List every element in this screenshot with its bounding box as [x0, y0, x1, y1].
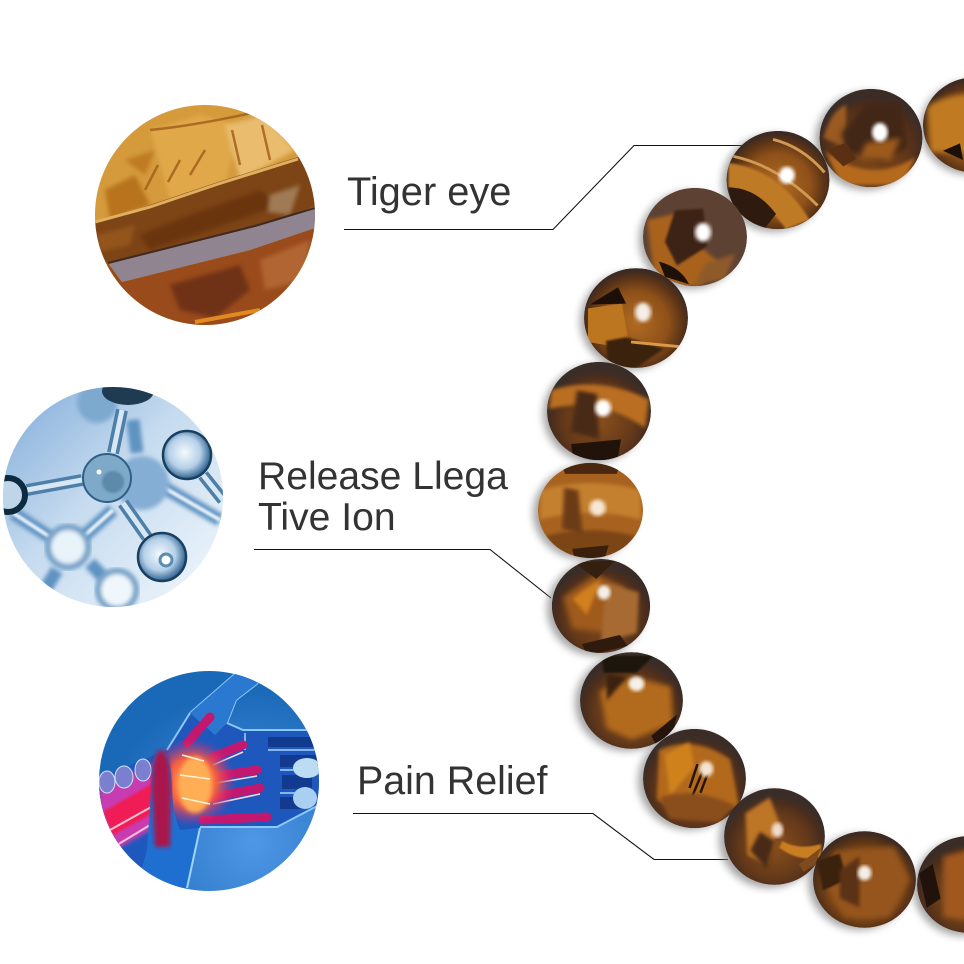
bead 4: [584, 268, 688, 368]
bead 9: [643, 729, 746, 828]
bead 12: [917, 836, 964, 933]
bead 5: [547, 362, 651, 463]
bead 10: [724, 788, 825, 885]
bead 13: [923, 77, 964, 173]
hand: [99, 673, 319, 891]
leader line: Release Llega Tive Ion: [254, 550, 551, 598]
label: Pain Relief: Pain Relief: [357, 759, 548, 803]
label: Release Llega Tive Ion: Release Llega: [258, 455, 508, 498]
forearm: [99, 760, 154, 850]
bead 1: [820, 89, 922, 187]
label: Release Llega Tive Ion: [258, 455, 508, 539]
bead 2: [727, 131, 829, 229]
finger bones: [187, 717, 267, 820]
leader line: Pain Relief: [353, 814, 728, 860]
bead 8: [580, 652, 683, 749]
bead 6: [538, 463, 643, 558]
photo: wrist pain: [99, 671, 321, 891]
bracelet: [533, 77, 964, 936]
photo: tiger eye stone: [95, 105, 320, 325]
bead 7: [552, 559, 650, 656]
bead shadows: [533, 81, 964, 936]
bead 11: [813, 831, 916, 928]
blurred background bonds: [13, 420, 220, 593]
pressing thumb: [142, 750, 199, 889]
leader line: Tiger eye: [344, 146, 745, 230]
label: Tiger eye: Tiger eye: [347, 170, 511, 214]
photo: molecules: [0, 377, 223, 609]
bead 3: [643, 188, 747, 286]
label: Release Llega Tive Ion: Tive Ion: [258, 496, 396, 539]
